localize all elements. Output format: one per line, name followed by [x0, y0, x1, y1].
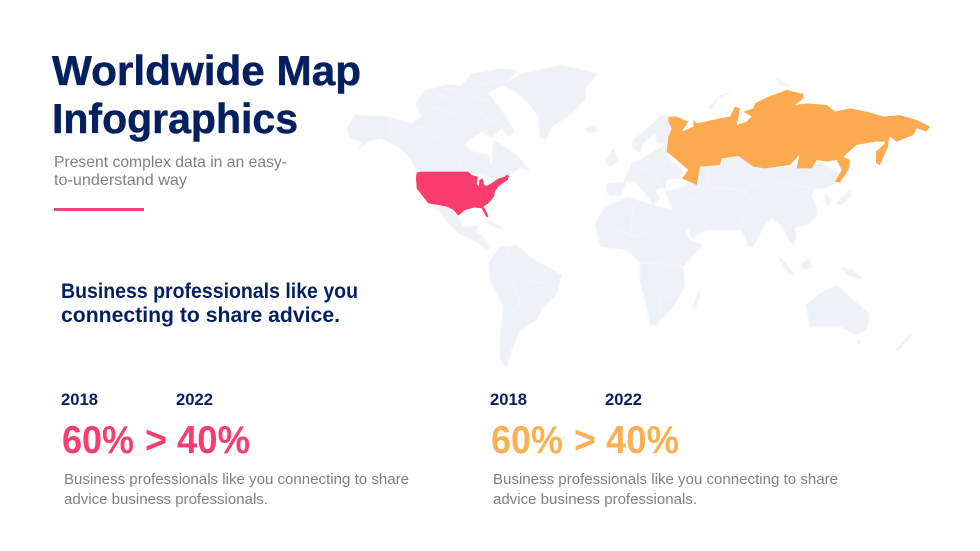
map: grey continents [347, 65, 912, 368]
percentages: > [574, 419, 596, 462]
heading: business professionals [61, 280, 358, 327]
subtitle [54, 154, 287, 189]
year labels: 2018 [61, 390, 98, 409]
map: Asia [690, 155, 852, 247]
percentages: 40% [606, 419, 679, 462]
map: Central and South America [420, 197, 562, 368]
stat block: orange [490, 390, 838, 508]
map highlight: Russia [667, 90, 930, 185]
percentages: 60% [62, 419, 134, 462]
accent line [54, 208, 144, 211]
description: Business professionals like you connecting to share [493, 471, 838, 488]
title [52, 47, 361, 142]
year labels: 2022 [176, 390, 213, 409]
year labels: 2022 [605, 390, 642, 409]
map highlight: United States [416, 172, 509, 217]
map: Europe [590, 115, 750, 230]
description [493, 471, 838, 508]
subtitle: to-understand way [54, 172, 187, 189]
description: advice business professionals. [493, 491, 697, 508]
year labels [61, 390, 213, 409]
map: Arabia, Africa and Oceania [640, 77, 912, 352]
heading: business professionals: connecting to share advice. [61, 304, 340, 327]
map: West Africa [595, 197, 677, 325]
subtitle: Present complex data in an easy- [54, 154, 287, 171]
description [64, 471, 409, 508]
heading: business professionals: Business professionals like you [61, 280, 358, 303]
description: advice business professionals. [64, 491, 268, 508]
percentages [491, 419, 679, 462]
percentages [62, 419, 250, 462]
percentages: 60% [491, 419, 563, 462]
stat block: pink [61, 390, 409, 508]
map: North America and Greenland [347, 65, 598, 178]
percentages: 40% [177, 419, 250, 462]
title: Worldwide Map [52, 47, 361, 94]
title: Infographics [52, 95, 298, 142]
year labels: 2018 [490, 390, 527, 409]
year labels [490, 390, 642, 409]
percentages: > [145, 419, 167, 462]
world map [347, 65, 930, 368]
description: Business professionals like you connecting to share [64, 471, 409, 488]
